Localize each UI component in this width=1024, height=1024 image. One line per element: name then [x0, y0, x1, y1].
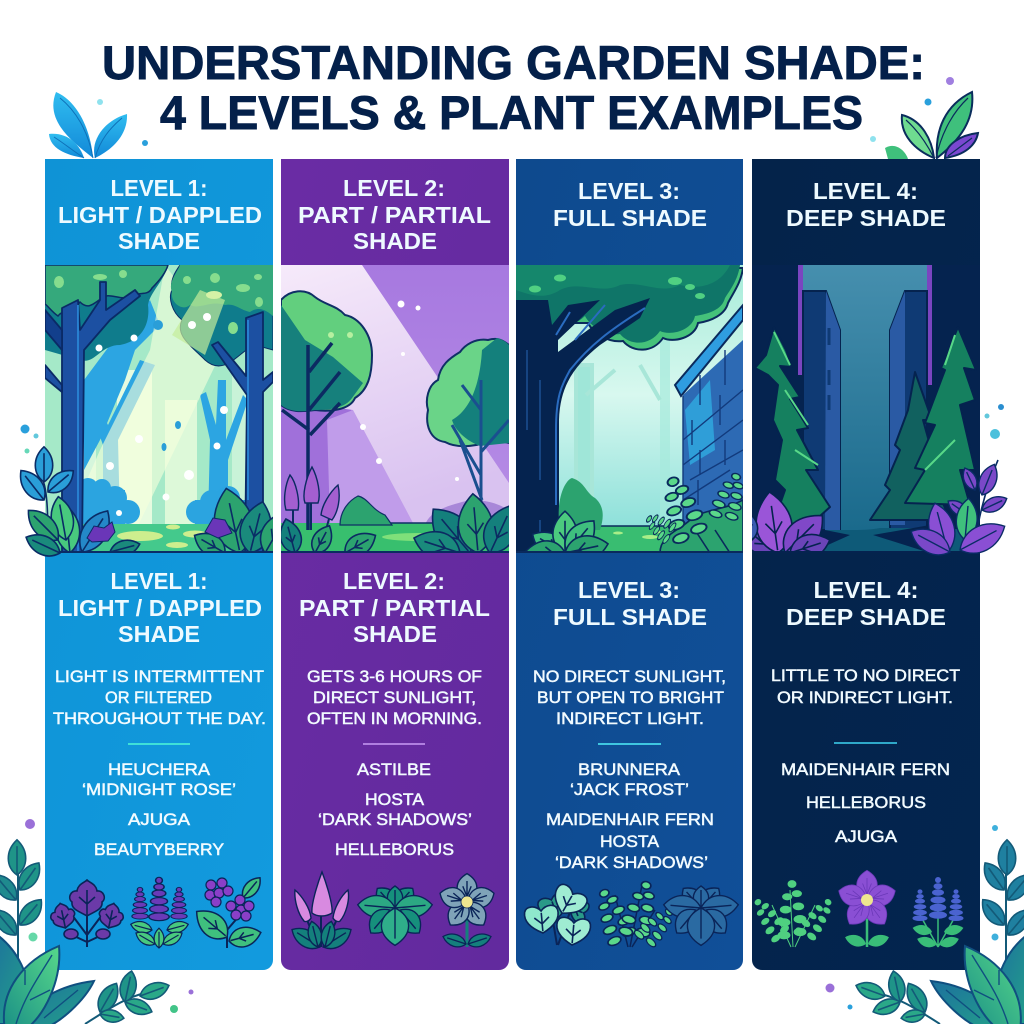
level 3 plant names: HOSTA: [600, 832, 660, 851]
level 3 heading: FULL SHADE: [553, 205, 707, 231]
fern sprigs: [646, 472, 743, 544]
icon: hosta: [357, 882, 433, 945]
foreground plants: [281, 492, 509, 551]
level 2 heading: PART / PARTIAL: [298, 202, 491, 228]
level 2 heading: LEVEL 2:: [343, 175, 445, 201]
level 4 description: LITTLE TO NO DIRECT: [771, 667, 960, 685]
decoration: top right leaves: [870, 77, 978, 159]
tree trunk and canopy: [516, 265, 743, 553]
level 1 heading: SHADE: [118, 228, 200, 254]
level 2 plant names: ASTILBE: [357, 760, 431, 779]
back trees: [84, 300, 246, 492]
level 2 plant names: HELLEBORUS: [335, 840, 454, 859]
leaf highlights: [54, 270, 263, 334]
level 2 plant names: ‘DARK SHADOWS’: [318, 810, 472, 829]
level 2 heading: [298, 175, 491, 254]
panel: level 1 light dappled shade: [45, 159, 273, 970]
brick wall: [675, 305, 743, 553]
icon: hellebore flower: [437, 874, 497, 950]
level 4 plant names: MAIDENHAIR FERN: [781, 760, 950, 779]
towers: [803, 291, 840, 530]
icon: blue ajuga: [912, 877, 964, 950]
icon: ajuga spikes: [129, 877, 190, 949]
level 4 details heading: [786, 577, 946, 630]
level 3 details heading: LEVEL 3:: [578, 577, 680, 603]
level 1 details heading: LEVEL 1:: [110, 568, 208, 594]
icon: astilbe: [288, 872, 355, 954]
panel: level 2 part partial shade: [276, 159, 526, 970]
decoration: right mid foliage: [906, 404, 1011, 562]
level 3 plant names: MAIDENHAIR FERN: [546, 810, 714, 829]
level 1 description: [53, 668, 266, 728]
level 1 heading: LEVEL 1:: [110, 175, 208, 201]
level 2 details heading: LEVEL 2:: [343, 568, 445, 594]
level 1 heading: LIGHT / DAPPLED: [58, 202, 262, 228]
level 2 plant names: [318, 760, 472, 859]
level 3 plant names: ‘DARK SHADOWS’: [555, 853, 708, 872]
level 1 description: OR FILTERED: [105, 689, 212, 707]
level 1 plant names: HEUCHERA: [108, 760, 211, 779]
title: [102, 36, 925, 139]
level 1 plant names: [82, 760, 236, 859]
level 4 details heading: DEEP SHADE: [786, 604, 946, 630]
level 2 description: [307, 668, 482, 728]
level 2 details heading: SHADE: [353, 621, 437, 647]
back bush: [340, 496, 392, 525]
level 1 heading: [58, 175, 262, 254]
sparkles: [96, 313, 228, 516]
illustration: dappled forest: [45, 265, 273, 553]
level 3 details heading: FULL SHADE: [553, 604, 707, 630]
foreground plants: [58, 487, 273, 551]
level 2 description: DIRECT SUNLIGHT,: [313, 689, 476, 707]
ground: [594, 526, 674, 551]
level 1 details heading: LIGHT / DAPPLED: [58, 595, 262, 621]
decoration: bottom left foliage: [0, 819, 194, 1024]
ground shadow: [782, 528, 963, 551]
level 1 plant names: ‘MIDNIGHT ROSE’: [82, 780, 236, 799]
level 3 plant names: ‘JACK FROST’: [570, 780, 689, 799]
icon: brunnera: [524, 882, 591, 946]
level 2 description: OFTEN IN MORNING.: [307, 710, 482, 728]
level 4 description: OR INDIRECT LIGHT.: [777, 689, 953, 707]
icon: dark hosta: [663, 882, 739, 945]
left tree: [281, 291, 372, 530]
icon: green fern: [747, 880, 839, 947]
lavender spikes in scene: [285, 467, 339, 530]
right tree: [426, 338, 509, 502]
decoration: bottom right foliage: [826, 825, 1024, 1024]
title: 4 LEVELS & PLANT EXAMPLES: [160, 86, 863, 139]
level 4 heading: LEVEL 4:: [813, 178, 918, 204]
blue bushes: [83, 478, 245, 524]
level 3 heading: [553, 178, 707, 231]
icon: beautyberry: [189, 874, 265, 950]
icon: maidenhair fern: [589, 878, 680, 950]
level 3 plant names: [546, 760, 714, 872]
light motes: [328, 300, 459, 481]
level 1 details heading: SHADE: [118, 621, 200, 647]
level 3 details heading: [553, 577, 707, 630]
bush and plants: [526, 478, 743, 551]
level 3 plant names: BRUNNERA: [578, 760, 681, 779]
illustration: deep shade alley: [752, 265, 974, 551]
tree trunks: [45, 282, 273, 553]
panel: level 4 deep shade: [733, 159, 980, 970]
ground: [55, 524, 244, 551]
level 1 plant names: BEAUTYBERRY: [94, 840, 224, 859]
level 4 plant names: HELLEBORUS: [806, 793, 926, 812]
level 4 plant names: [781, 760, 950, 846]
level 1 description: THROUGHOUT THE DAY.: [53, 710, 266, 728]
level 2 heading: SHADE: [353, 228, 437, 254]
ground: [281, 523, 509, 553]
illustration: tree and wall: [516, 265, 751, 565]
level 2 details heading: PART / PARTIAL: [299, 595, 490, 621]
level 1 description: LIGHT IS INTERMITTENT: [55, 668, 264, 686]
canopy: [45, 265, 168, 361]
level 3 description: BUT OPEN TO BRIGHT: [537, 689, 724, 707]
level 3 description: INDIRECT LIGHT.: [556, 710, 704, 728]
level 4 heading: DEEP SHADE: [786, 205, 946, 231]
decoration: top left blue leaves: [49, 92, 148, 158]
level 3 description: [533, 668, 726, 728]
illustration: partial sun with trees: [281, 265, 509, 553]
level 4 details heading: LEVEL 4:: [814, 577, 918, 603]
level 2 details heading: [299, 568, 490, 647]
icon: purple flower: [836, 870, 898, 949]
level 2 description: GETS 3-6 HOURS OF: [307, 668, 482, 686]
level 3 description: NO DIRECT SUNLIGHT,: [533, 668, 726, 686]
purple foliage: [752, 493, 829, 551]
level 4 description: [771, 667, 960, 707]
panel: level 3 full shade: [516, 159, 751, 970]
level 3 heading: LEVEL 3:: [578, 178, 680, 204]
decoration: left mid foliage: [14, 424, 79, 561]
purple flowers: [87, 518, 232, 542]
icon: heuchera: [48, 880, 126, 947]
level 1 details heading: [58, 568, 262, 647]
level 1 plant names: AJUGA: [128, 810, 191, 829]
title: UNDERSTANDING GARDEN SHADE:: [102, 36, 925, 89]
level 2 plant names: HOSTA: [365, 790, 425, 809]
pines: [756, 330, 974, 523]
level 4 plant names: AJUGA: [835, 827, 898, 846]
level 4 heading: [786, 178, 946, 231]
